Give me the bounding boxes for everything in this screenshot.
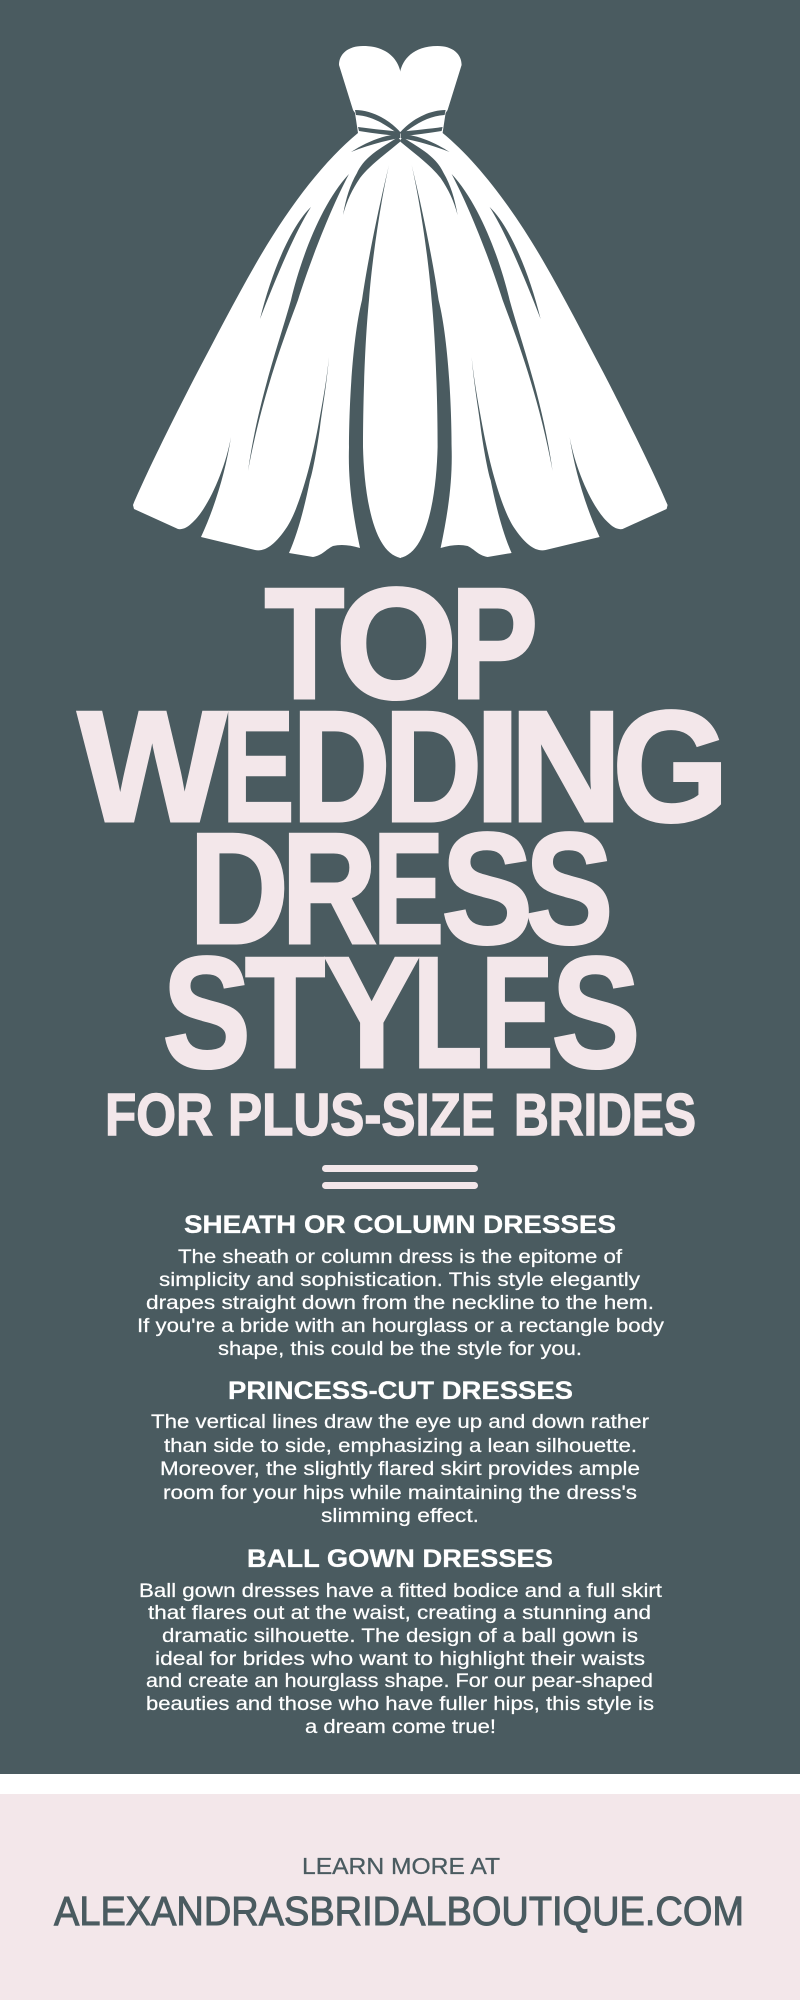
text block: princess-cut: than side to side, emphasizing a lean silhouette. xyxy=(164,1436,637,1457)
title: E xyxy=(373,801,444,977)
title: O xyxy=(336,556,457,732)
text block: ball gown: a dream come true! xyxy=(305,1717,496,1738)
title: R xyxy=(281,801,377,977)
title: S xyxy=(525,801,613,977)
title xyxy=(78,556,729,1101)
text block: princess-cut xyxy=(151,1412,650,1527)
text block: ball gown: that flares out at the waist, creating a stunning and xyxy=(148,1603,651,1624)
title: S xyxy=(442,801,533,977)
icon: wedding dress xyxy=(133,46,668,558)
title: D xyxy=(384,679,482,855)
heading: princess-cut: PRINCESS-CUT DRESSES xyxy=(228,1377,573,1405)
subtitle: PLUS-SIZE xyxy=(228,1082,495,1148)
text block: ball gown: beauties and those who have fuller hips, this style is xyxy=(146,1694,654,1715)
title: D xyxy=(292,679,391,855)
text block: princess-cut: room for your hips while maintaining the dress's xyxy=(163,1483,637,1504)
section: sheath or column dresses xyxy=(137,1211,665,1360)
section: ball gown dresses xyxy=(139,1545,663,1738)
heading: sheath: SHEATH OR COLUMN DRESSES xyxy=(184,1211,616,1239)
section: princess-cut dresses xyxy=(151,1377,650,1527)
text block: ball gown: dramatic silhouette. The design of a ball gown is xyxy=(162,1626,638,1647)
title: S xyxy=(552,925,640,1101)
text block: sheath xyxy=(137,1247,665,1360)
title: T xyxy=(264,556,344,732)
text block: sheath: simplicity and sophistication. This style elegantly xyxy=(159,1270,641,1291)
subtitle: BRIDES xyxy=(514,1082,696,1148)
title: L xyxy=(413,925,482,1101)
text block: sheath: If you're a bride with an hourglass or a rectangle body xyxy=(137,1316,665,1337)
text block: ball gown: ideal for brides who want to highlight their waists xyxy=(155,1649,645,1670)
subtitle: FOR xyxy=(105,1082,213,1148)
text block: sheath: drapes straight down from the neckline to the hem. xyxy=(146,1293,654,1314)
title: D xyxy=(189,801,289,977)
panel: footer background xyxy=(0,1794,800,2000)
text block: princess-cut: slimming effect. xyxy=(321,1506,479,1527)
double line divider xyxy=(322,1165,478,1189)
text block: ball gown xyxy=(139,1581,663,1738)
text block: princess-cut: The vertical lines draw the eye up and down rather xyxy=(151,1412,650,1433)
title: Y xyxy=(324,925,420,1101)
title: I xyxy=(474,679,521,855)
text block: sheath: shape, this could be the style for you. xyxy=(218,1339,582,1360)
website url: ALEXANDRASBRIDALBOUTIQUE.COM xyxy=(54,1888,744,1934)
call to action label: LEARN MORE AT xyxy=(302,1853,500,1879)
title: W xyxy=(78,679,227,855)
title: T xyxy=(245,925,325,1101)
heading: ball gown: BALL GOWN DRESSES xyxy=(247,1545,553,1573)
title: E xyxy=(481,925,553,1101)
title: G xyxy=(612,679,729,855)
text block: ball gown: Ball gown dresses have a fitted bodice and a full skirt xyxy=(139,1581,663,1602)
title: S xyxy=(163,925,251,1101)
title: P xyxy=(450,556,538,732)
text block: sheath: The sheath or column dress is the epitome of xyxy=(178,1247,623,1268)
title: E xyxy=(222,679,294,855)
title: N xyxy=(510,679,622,855)
text block: princess-cut: Moreover, the slightly flared skirt provides ample xyxy=(160,1459,640,1480)
text block: ball gown: and create an hourglass shape. For our pear-shaped xyxy=(146,1671,653,1692)
